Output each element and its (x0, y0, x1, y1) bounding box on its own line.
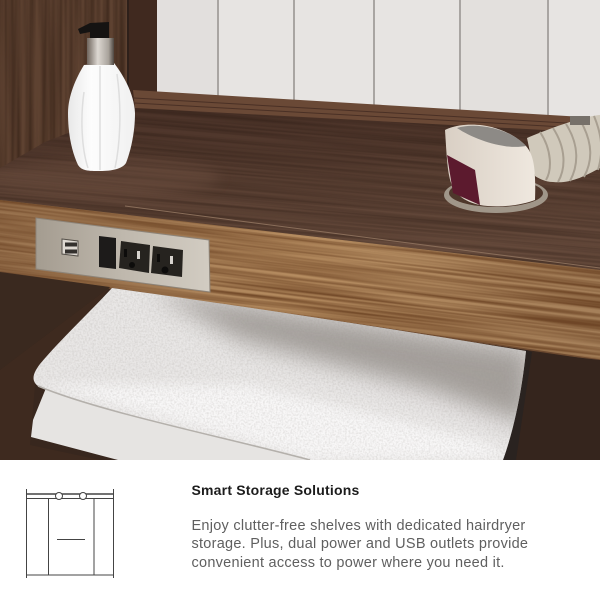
icon: vanity front elevation line drawing (26, 489, 114, 578)
product photo: vanity shelf with outlets, hairdryer and towels (0, 0, 600, 460)
lower cabinet left panel (0, 272, 110, 460)
power outlet plate (36, 218, 210, 292)
dark cabinet background (0, 0, 600, 460)
upper towel (20, 280, 540, 460)
rocker switch (99, 236, 116, 269)
left outlet socket (119, 241, 150, 273)
hairdryer holder ring (444, 177, 548, 213)
body text: storage. Plus, dual power and USB outlets provide (192, 536, 528, 552)
towel fold shadow (38, 386, 310, 460)
hairdryer body (445, 125, 535, 206)
soap dispenser (68, 22, 135, 171)
USB ports (62, 239, 78, 256)
lower towel (31, 388, 315, 460)
hairdryer hose (527, 115, 600, 182)
body text: Enjoy clutter-free shelves with dedicated hairdryer (192, 518, 526, 534)
shelf back rail (133, 90, 600, 133)
body text: convenient access to power where you need it. (192, 554, 505, 570)
shelf top surface (0, 109, 600, 270)
heading: Smart Storage Solutions (192, 482, 359, 498)
wooden side panel (0, 0, 157, 170)
white panelled wall (157, 0, 600, 125)
shelf front face (0, 200, 600, 360)
right outlet socket (151, 246, 183, 277)
body text (192, 518, 528, 570)
lower right cabinet (503, 350, 600, 460)
